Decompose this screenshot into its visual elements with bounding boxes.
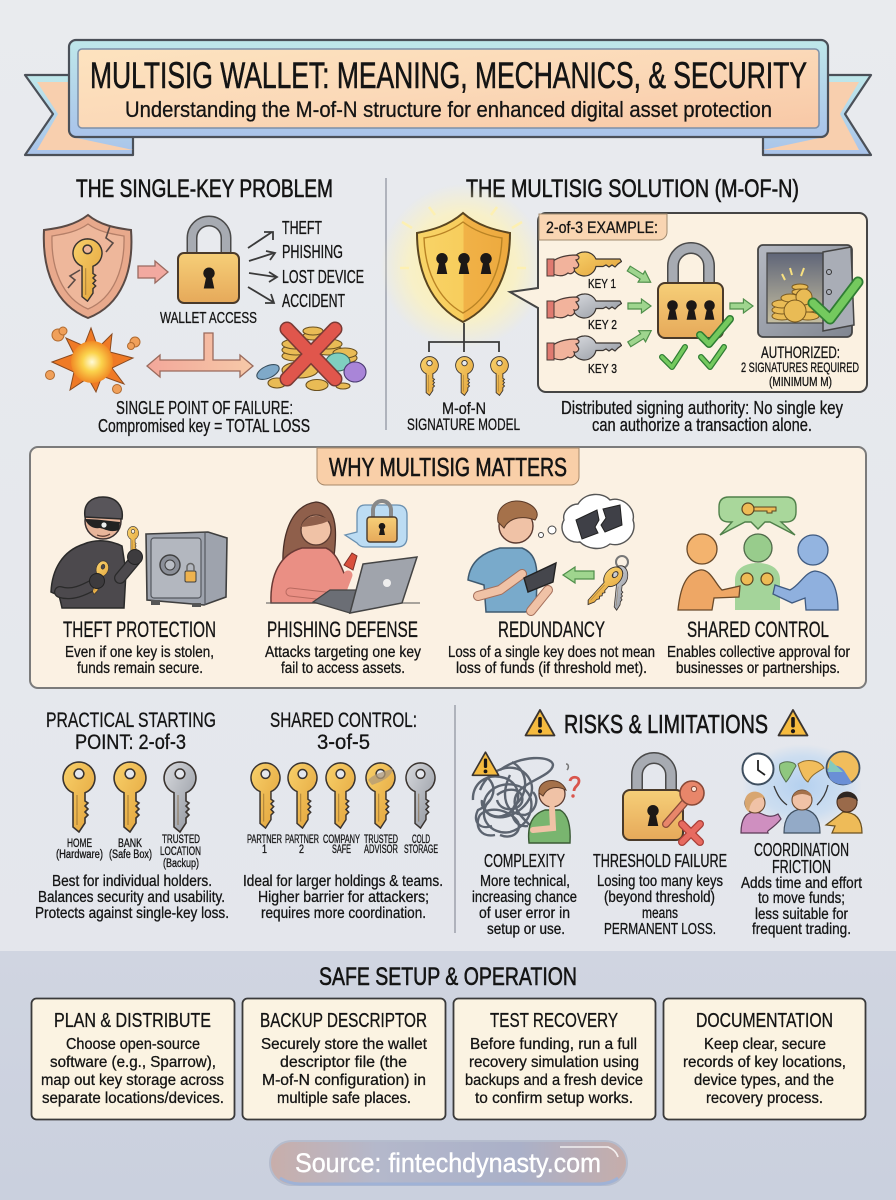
card title: DOCUMENTATION	[696, 1010, 833, 1032]
key labels: (Backup)	[163, 858, 199, 870]
icon: woman at laptop with lock bubble	[266, 501, 420, 613]
subtitle: Understanding the M-of-N structure for enhanced digital asset protection	[125, 97, 772, 122]
threat list: LOST DEVICE	[282, 267, 364, 287]
card text: to confirm setup works.	[475, 1090, 633, 1107]
arrow to safe	[730, 299, 753, 313]
card text: recovery simulation using	[469, 1054, 639, 1071]
key labels: PARTNER	[285, 834, 319, 846]
key labels: TRUSTED	[162, 834, 200, 846]
panel: the single-key problem	[44, 175, 366, 436]
heading: PRACTICAL STARTING	[46, 709, 216, 732]
key labels	[247, 834, 438, 856]
title banner	[25, 40, 871, 155]
key labels: TRUSTED	[364, 834, 398, 846]
card title: PLAN & DISTRIBUTE	[54, 1010, 211, 1032]
item: theft protection	[51, 497, 227, 677]
card title: TEST RECOVERY	[490, 1010, 618, 1032]
item text: frequent trading.	[752, 921, 851, 938]
panel: the multisig solution	[381, 175, 867, 435]
model caption: M-of-N	[442, 399, 486, 418]
threat list: ACCIDENT	[282, 291, 345, 311]
item: phishing defense	[265, 501, 421, 677]
threat arrows	[248, 232, 277, 303]
card text: Before funding, run a full	[470, 1036, 637, 1053]
item text	[472, 873, 577, 938]
hands holding keys	[547, 252, 622, 360]
description	[35, 873, 229, 922]
item text: More technical,	[480, 873, 570, 890]
item text: to move funds;	[758, 890, 845, 907]
item title: REDUNDANCY	[498, 617, 605, 642]
description: Ideal for larger holdings & teams.	[243, 873, 443, 890]
item: threshold failure	[593, 758, 727, 938]
authorized caption	[741, 343, 859, 389]
heading	[270, 709, 417, 754]
failure caption: Compromised key = TOTAL LOSS	[98, 416, 310, 436]
panel: risks and limitations	[472, 709, 862, 938]
right ribbon	[763, 75, 871, 155]
item text	[597, 873, 723, 938]
wallet access label: WALLET ACCESS	[160, 310, 257, 327]
signature checkmarks	[662, 319, 730, 367]
item text: businesses or partnerships.	[676, 660, 840, 677]
item text: Adds time and effort	[741, 875, 862, 892]
icon: three people sharing key	[678, 497, 838, 610]
key labels: PARTNER	[247, 834, 282, 846]
item text: Attacks targeting one key	[265, 644, 421, 661]
item text	[741, 875, 862, 938]
description: requires more coordination.	[261, 905, 426, 922]
icon: lock with coral key and cross	[623, 758, 704, 842]
heading: THE SINGLE-KEY PROBLEM	[76, 175, 333, 203]
section heading: SAFE SETUP & OPERATION	[319, 963, 577, 991]
item text: funds remain secure.	[77, 660, 203, 677]
item title: FRICTION	[772, 857, 831, 877]
panel: practical 2-of-3	[35, 709, 229, 922]
left ribbon	[25, 75, 133, 155]
item: complexity	[472, 752, 579, 938]
item text: PERMANENT LOSS.	[604, 921, 716, 938]
heading: POINT: 2-of-3	[75, 731, 186, 754]
item text: of user error in	[479, 905, 570, 922]
icon: three keyhole lock	[658, 248, 723, 338]
card: plan and distribute	[32, 998, 234, 1120]
solution caption	[561, 398, 843, 435]
item title: COORDINATION	[754, 840, 849, 860]
key labels: COLD	[412, 834, 430, 846]
authorized caption: AUTHORIZED:	[761, 343, 840, 362]
description: Protects against single-key loss.	[35, 905, 229, 922]
item title: THRESHOLD FAILURE	[593, 851, 727, 871]
item title: PHISHING DEFENSE	[267, 617, 418, 642]
icon: man with tablet, broken card and keys	[468, 494, 634, 612]
icon row: three keys	[63, 762, 196, 832]
item title: COMPLEXITY	[484, 851, 565, 871]
heading	[46, 709, 216, 754]
key labels	[56, 834, 201, 870]
solution caption: can authorize a transaction alone.	[592, 415, 812, 435]
authorized caption: (MINIMUM M)	[769, 374, 832, 389]
description	[243, 873, 443, 922]
card text: map out key storage across	[41, 1072, 224, 1089]
item text	[265, 644, 421, 677]
icon: tangled lines and puzzled man	[472, 752, 579, 843]
icon: thief with key and safe	[51, 497, 227, 608]
key labels: (Safe Box)	[109, 849, 152, 861]
card text: software (e.g., Sparrow),	[50, 1054, 216, 1071]
item text	[667, 644, 851, 677]
card text: backups and a fresh device	[465, 1072, 643, 1089]
item text	[65, 644, 214, 677]
card text	[41, 1036, 224, 1107]
key labels: LOCATION	[160, 846, 201, 858]
icon: open safe with coins	[758, 245, 858, 337]
arrow: wallet failure to both outcomes	[147, 333, 253, 377]
model caption	[407, 399, 520, 434]
item text: less suitable for	[755, 906, 849, 923]
description: Higher barrier for attackers;	[258, 889, 429, 906]
green arrows to lock	[625, 263, 655, 350]
panel: why multisig matters	[30, 447, 866, 688]
item text: (beyond threshold)	[604, 889, 715, 906]
key labels: HOME	[67, 838, 92, 850]
item text: means	[642, 905, 678, 922]
item title: THEFT PROTECTION	[63, 617, 216, 642]
description: Balances security and usability.	[38, 889, 225, 906]
card text	[683, 1036, 846, 1107]
key labels: BANK	[118, 838, 142, 850]
card text: recovery process.	[706, 1090, 823, 1107]
key labels: KEY 2	[588, 317, 617, 332]
item text	[448, 644, 655, 677]
key labels: 1	[262, 844, 267, 856]
item: shared control	[667, 497, 851, 677]
icon: glowing shield with three keyholes	[381, 184, 545, 348]
card text: multiple safe places.	[277, 1090, 411, 1107]
panel: 2-of-3 example	[510, 213, 867, 392]
card text: Keep clear, secure	[704, 1036, 826, 1053]
heading: 3-of-5	[317, 731, 370, 754]
panel: safe setup and operation	[32, 963, 866, 1120]
card text: records of key locations,	[683, 1054, 846, 1071]
item: redundancy	[448, 494, 655, 677]
example label: 2-of-3 EXAMPLE:	[546, 218, 658, 237]
item text: setup or use.	[487, 921, 565, 938]
item text: fail to access assets.	[281, 660, 405, 677]
card text: device types, and the	[694, 1072, 834, 1089]
key labels: ADVISOR	[364, 844, 398, 856]
failure caption: SINGLE POINT OF FAILURE:	[116, 398, 293, 418]
icon: cracked shield with key	[44, 215, 131, 318]
card: test recovery	[454, 998, 656, 1120]
card title: BACKUP DESCRIPTOR	[260, 1010, 427, 1032]
icon row: five keys	[251, 763, 435, 828]
item title	[754, 840, 849, 877]
item text: Enables collective approval for	[667, 644, 851, 661]
card: backup descriptor	[242, 998, 446, 1120]
solution caption: Distributed signing authority: No single key	[561, 398, 843, 418]
key labels: 2	[299, 844, 304, 856]
card text: descriptor file (the	[280, 1054, 407, 1071]
example tab	[539, 214, 667, 240]
item text: increasing chance	[472, 889, 577, 906]
icon: clock, map, globe and three people	[741, 744, 862, 833]
section heading: WHY MULTISIG MATTERS	[329, 452, 567, 482]
card text: M-of-N configuration) in	[262, 1072, 426, 1089]
icon: crossed out coin pile	[255, 327, 366, 390]
source pill	[270, 1141, 627, 1185]
failure caption	[98, 398, 310, 436]
model caption: SIGNATURE MODEL	[407, 415, 520, 434]
key labels	[588, 276, 617, 376]
card text: Securely store the wallet	[261, 1036, 428, 1053]
item: coordination friction	[741, 744, 862, 938]
threat list: PHISHING	[282, 242, 343, 262]
card text	[465, 1036, 643, 1107]
source text: Source: fintechdynasty.com	[295, 1148, 601, 1178]
heading with warning icons: RISKS & LIMITATIONS	[564, 709, 768, 739]
item text: loss of funds (if threshold met).	[456, 660, 647, 677]
icon: padlock wallet access	[178, 221, 239, 303]
heading: THE MULTISIG SOLUTION (M-OF-N)	[466, 175, 799, 203]
signature tree with keys	[421, 323, 508, 395]
threat list	[282, 218, 364, 311]
key labels: KEY 1	[588, 276, 616, 291]
key labels: COMPANY	[323, 834, 360, 846]
arrow	[138, 261, 168, 283]
panel: shared control 3-of-5	[243, 709, 443, 922]
item text: Loss of a single key does not mean	[448, 644, 655, 661]
icon: explosion	[46, 327, 140, 394]
threat list: THEFT	[282, 218, 322, 238]
section tab	[317, 448, 579, 485]
key labels: KEY 3	[588, 361, 617, 376]
key labels: SAFE	[332, 844, 351, 856]
item text: Losing too many keys	[597, 873, 723, 890]
banner plate	[69, 40, 828, 137]
key labels: (Hardware)	[56, 849, 103, 861]
heading: SHARED CONTROL:	[270, 709, 417, 732]
card text: separate locations/devices.	[42, 1090, 224, 1107]
key labels: STORAGE	[404, 844, 438, 856]
item text: Even if one key is stolen,	[65, 644, 214, 661]
description: Best for individual holders.	[52, 873, 212, 890]
card text: Choose open-source	[66, 1036, 200, 1053]
item title: SHARED CONTROL	[687, 617, 829, 642]
card text	[261, 1036, 428, 1107]
card: documentation	[664, 998, 866, 1120]
